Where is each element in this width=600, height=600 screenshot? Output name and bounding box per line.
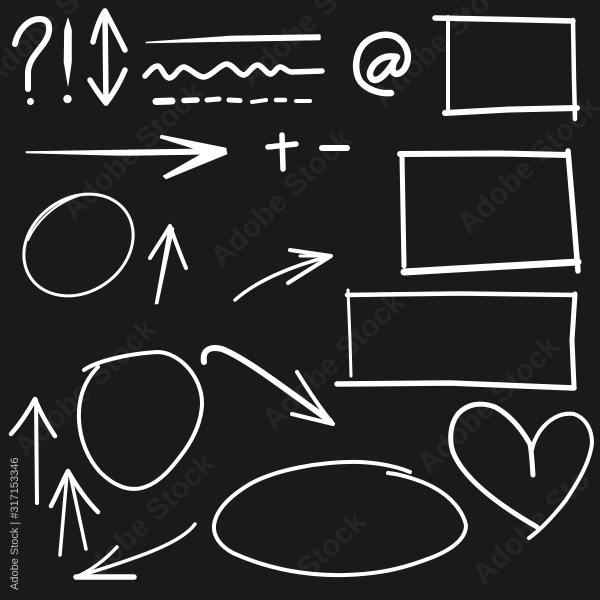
icon: at sign (356, 35, 408, 93)
stock id label: Adobe Stock | #317153346 (9, 457, 21, 590)
icon: exclamation mark (63, 18, 72, 103)
panel: rectangle one (435, 17, 577, 119)
blob circle (79, 352, 202, 489)
double-shaft up arrow (51, 471, 98, 555)
icon: question mark (15, 19, 49, 105)
large oval (214, 462, 466, 575)
dashed underline (156, 99, 310, 102)
bottom-left curved arrow (76, 524, 195, 577)
icon: plus sign (268, 135, 296, 169)
watermark pattern: Adobe Stock (256, 285, 411, 437)
watermark pattern: Adobe Stock (8, 312, 163, 464)
small up arrow (150, 226, 186, 304)
watermark pattern: Stock (291, 505, 372, 585)
watermark pattern: Adobe Stock (204, 122, 359, 274)
icon: minus sign (322, 145, 347, 151)
panel: rectangle three (337, 290, 575, 388)
panel: rectangle two (400, 151, 578, 272)
tall up arrow (11, 399, 55, 503)
watermark pattern: dobe Stock (82, 447, 221, 583)
straight underline (146, 34, 320, 43)
curved diagonal arrow (235, 250, 331, 300)
icon: heart (451, 404, 592, 538)
sketched circle (4, 173, 153, 317)
watermark pattern: Adobe Stock (56, 75, 211, 227)
icon: double-headed arrow (90, 11, 125, 103)
long right arrow (26, 135, 227, 179)
wavy underline (145, 64, 322, 78)
watermark pattern: Adobe Sto (466, 463, 597, 591)
watermark pattern: Adobe Stock (411, 329, 566, 481)
swoop arrow (204, 348, 333, 424)
